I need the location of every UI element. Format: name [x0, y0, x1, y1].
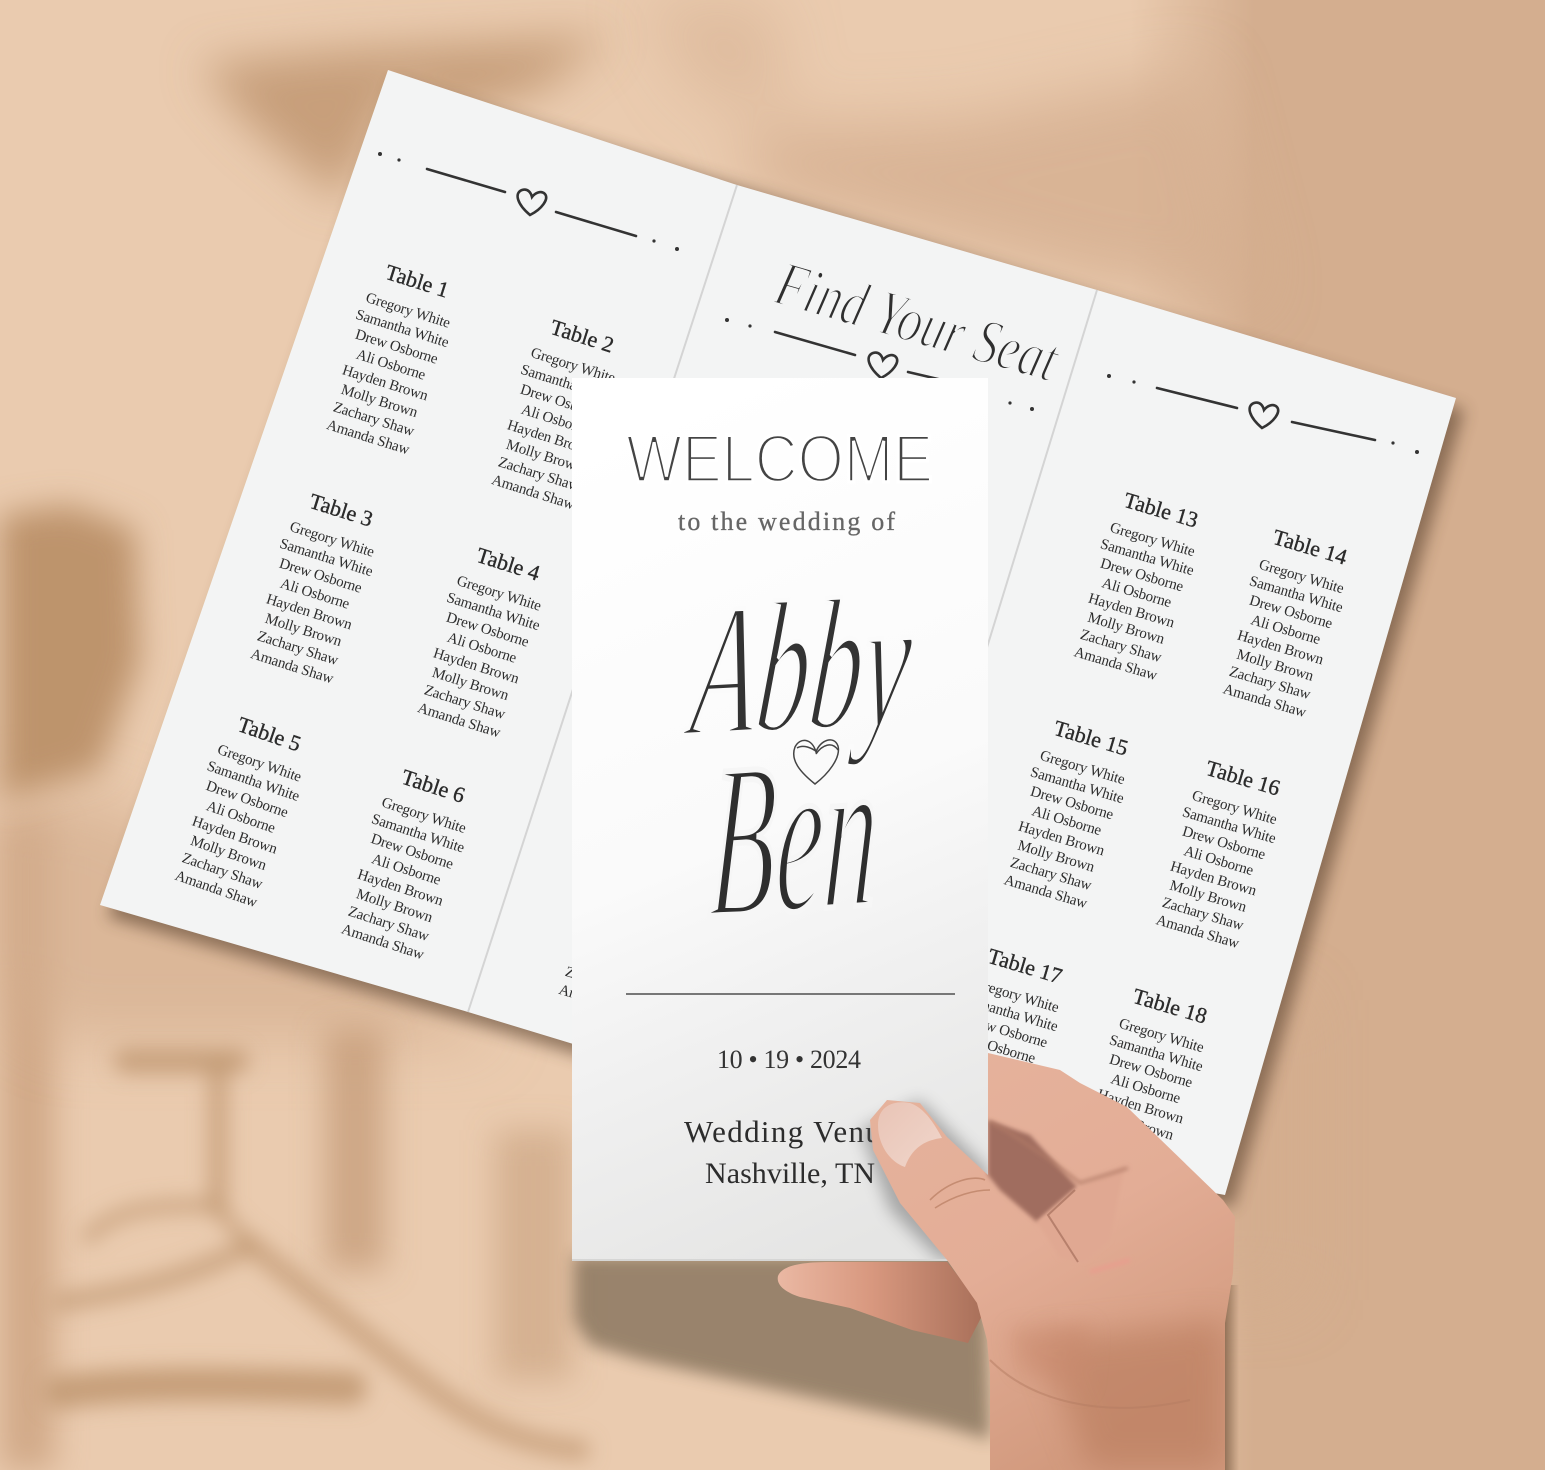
table 13 [1067, 484, 1211, 686]
table 1: Zachary Shaw [331, 399, 416, 440]
table 11: Gregory White [595, 855, 684, 896]
table 14: Drew Osborne [1247, 593, 1334, 632]
table 16: Zachary Shaw [1160, 895, 1245, 934]
table 4: Ali Osborne [445, 630, 519, 667]
table 11: Amanda Shaw [557, 982, 644, 1022]
divider with heart: middle panel [725, 318, 1034, 411]
table 3: Samantha White [278, 536, 375, 580]
table 18: Molly Brown [1095, 1106, 1176, 1144]
table 4 [410, 537, 559, 743]
table 15: Samantha White [1028, 764, 1126, 807]
table 4: Hayden Brown [431, 645, 521, 688]
table 2: Ali Osborne [519, 402, 593, 439]
table 13: Drew Osborne [1098, 556, 1185, 595]
heading: Find Your Seat: Find Your Seat [767, 247, 1068, 396]
table 14: Zachary Shaw [1227, 664, 1312, 703]
table 5: Molly Brown [188, 833, 269, 874]
table 4: Table 4 [473, 542, 543, 586]
table 17 [941, 940, 1075, 1106]
table 4: Molly Brown [430, 665, 511, 704]
table 4: Zachary Shaw [422, 682, 507, 723]
table 2: Zachary Shaw [496, 454, 581, 495]
table 18: Hayden Brown [1095, 1087, 1186, 1127]
table 2 [484, 309, 633, 515]
table 5: Ali Osborne [204, 798, 278, 837]
table 16: Samantha White [1180, 804, 1278, 847]
table 13: Molly Brown [1086, 610, 1167, 648]
table 4: Drew Osborne [444, 610, 531, 651]
table 11 [552, 819, 698, 1024]
table 1: Amanda Shaw [325, 417, 411, 458]
table 1: Drew Osborne [353, 327, 440, 368]
table 15: Table 15 [1051, 715, 1131, 761]
table 6: Molly Brown [354, 886, 435, 926]
table 4: Samantha White [445, 590, 542, 634]
table 6: Drew Osborne [369, 831, 455, 873]
lower finger [778, 1262, 985, 1343]
table 17: Ali Osborne [964, 1031, 1038, 1067]
table 18: Drew Osborne [1107, 1052, 1194, 1091]
table 15: Ali Osborne [1030, 803, 1104, 839]
table 2: Molly Brown [504, 437, 585, 476]
table 13: Ali Osborne [1100, 575, 1174, 611]
table 14 [1216, 521, 1360, 723]
table 15: Gregory White [1038, 748, 1127, 788]
table 16: Amanda Shaw [1154, 912, 1241, 952]
subtitle: to the wedding of [678, 507, 895, 536]
table 15: Amanda Shaw [1002, 872, 1089, 912]
table 18: Gregory White [1117, 1016, 1206, 1056]
card surface [572, 378, 988, 1260]
table 5: Table 5 [235, 712, 304, 756]
table 6: Table 6 [399, 764, 468, 808]
table 16: Hayden Brown [1168, 859, 1259, 899]
table 17: Table 17 [985, 943, 1065, 989]
table 13: Zachary Shaw [1078, 627, 1163, 666]
table 15: Drew Osborne [1028, 784, 1115, 823]
table 3: Hayden Brown [264, 591, 354, 634]
table 15: Zachary Shaw [1008, 855, 1093, 894]
table 17: Samantha White [962, 992, 1060, 1035]
table 2: Drew Osborne [518, 382, 605, 423]
table 14: Table 14 [1270, 524, 1350, 570]
card: welcome program [572, 378, 988, 1260]
table 6: Samantha White [369, 811, 467, 857]
panel surface [100, 70, 1456, 1195]
table 11: Table 11 [609, 822, 688, 868]
table 3: Gregory White [288, 519, 376, 561]
divider with heart: left panel [378, 152, 679, 251]
hand shading [1040, 1320, 1225, 1470]
table 6: Hayden Brown [355, 867, 445, 910]
table 3: Molly Brown [263, 611, 344, 650]
table 14: Molly Brown [1235, 647, 1316, 685]
table 14: Samantha White [1247, 573, 1345, 616]
name: Ben: Ben [706, 710, 882, 964]
table 2: Samantha White [519, 362, 616, 406]
back of hand [870, 1053, 1235, 1470]
table 4: Gregory White [455, 573, 543, 615]
table 13: Hayden Brown [1086, 591, 1177, 631]
table 5: Drew Osborne [204, 778, 290, 821]
table 16: Molly Brown [1168, 878, 1249, 916]
table 18: Samantha White [1107, 1032, 1205, 1075]
table 1: Hayden Brown [340, 362, 430, 405]
table 6 [334, 759, 484, 965]
table 11: Hayden Brown [572, 927, 662, 968]
icon: heart [794, 740, 838, 784]
table 1: Molly Brown [339, 382, 420, 421]
table 11: Drew Osborne [585, 891, 672, 932]
table 6: Amanda Shaw [339, 921, 426, 963]
table 14: Hayden Brown [1235, 628, 1326, 668]
divider with heart: right panel [1107, 374, 1419, 454]
table 6: Zachary Shaw [346, 904, 431, 945]
table 15: Molly Brown [1016, 838, 1097, 876]
table 3 [243, 483, 392, 689]
table 5 [168, 706, 320, 913]
table 14: Amanda Shaw [1221, 681, 1308, 721]
table 13: Amanda Shaw [1072, 644, 1159, 684]
thumb knuckle [930, 1178, 990, 1208]
table 1: Gregory White [364, 290, 452, 332]
table 5: Gregory White [215, 742, 304, 786]
table 15: Hayden Brown [1016, 819, 1107, 859]
table listings [168, 254, 1360, 1146]
table 5: Amanda Shaw [173, 868, 259, 911]
table 17: Molly Brown [950, 1066, 1031, 1104]
table 16: Ali Osborne [1182, 843, 1256, 879]
table 16: Drew Osborne [1180, 824, 1267, 863]
table 2: Gregory White [529, 345, 617, 387]
table 13: Table 13 [1121, 487, 1201, 533]
table 3: Drew Osborne [277, 556, 364, 597]
table 18: Ali Osborne [1109, 1071, 1183, 1107]
table 13: Gregory White [1108, 520, 1197, 560]
table 3: Ali Osborne [278, 576, 352, 613]
table 16 [1149, 752, 1293, 954]
table 6: Gregory White [379, 795, 468, 837]
name: Abby: Abby [679, 556, 921, 776]
table 4: Amanda Shaw [416, 700, 502, 741]
location: Nashville, TN [705, 1157, 875, 1190]
table 11: Samantha White [585, 871, 682, 915]
venue: Wedding Venue [684, 1114, 896, 1149]
paper shadow on wall [108, 82, 1464, 1207]
panel: tri-fold seating chart [100, 70, 1456, 1195]
hand shadow on wall [1225, 1285, 1239, 1470]
title: WELCOME: WELCOME [626, 421, 933, 497]
table 3: Amanda Shaw [249, 646, 335, 687]
table 14: Ali Osborne [1249, 612, 1323, 648]
table 16: Gregory White [1190, 788, 1279, 828]
table 11: Molly Brown [571, 947, 652, 985]
card shadow on wall [574, 1255, 990, 1440]
table 11: Zachary Shaw [563, 964, 648, 1004]
table 6: Ali Osborne [369, 851, 443, 889]
divider line [626, 993, 955, 995]
table 17: Drew Osborne [962, 1012, 1049, 1051]
table 14: Gregory White [1257, 557, 1346, 597]
table 15 [997, 712, 1141, 914]
table 2: Hayden Brown [505, 417, 595, 460]
table 3: Table 3 [306, 488, 376, 532]
table 2: Table 2 [547, 314, 617, 358]
table 1: Samantha White [354, 307, 451, 351]
table 2: Amanda Shaw [490, 472, 576, 513]
table 18: Table 18 [1130, 983, 1210, 1029]
icon: hand holding the card [778, 1053, 1235, 1470]
table 3: Zachary Shaw [255, 628, 340, 669]
table 1 [319, 254, 468, 460]
table 1: Ali Osborne [354, 347, 428, 384]
table 18 [1086, 980, 1220, 1146]
table 16: Table 16 [1203, 755, 1283, 801]
thumb shadow on card [860, 1100, 988, 1260]
table 5: Hayden Brown [190, 814, 280, 858]
table 13: Samantha White [1098, 536, 1196, 579]
table 11: Ali Osborne [586, 911, 659, 948]
table 17: Gregory White [972, 976, 1061, 1016]
date: 10 • 19 • 2024 [717, 1045, 861, 1074]
table 5: Zachary Shaw [180, 850, 265, 893]
thumbnail [878, 1102, 942, 1167]
table 17: Hayden Brown [950, 1047, 1041, 1087]
table 1: Table 1 [382, 259, 452, 303]
table 5: Samantha White [205, 758, 302, 805]
